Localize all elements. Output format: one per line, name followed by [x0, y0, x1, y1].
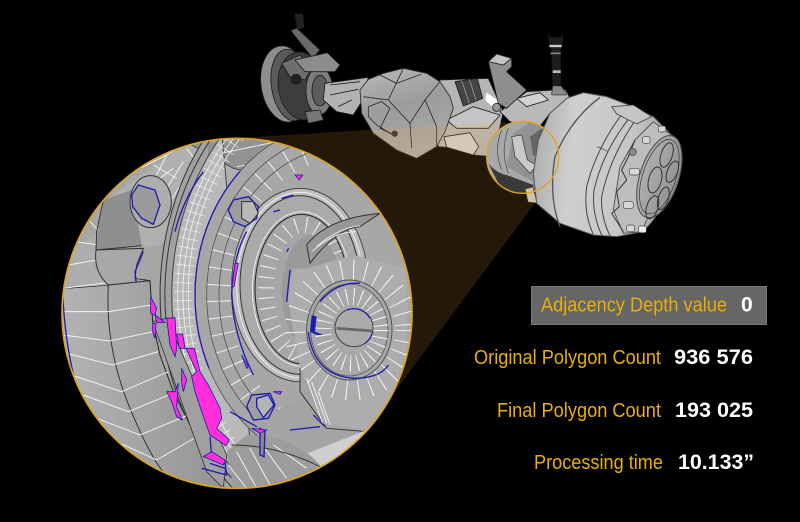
differential housing	[360, 68, 453, 158]
final polygon count	[497, 399, 753, 422]
processing time: Processing time	[534, 452, 663, 474]
original polygon count: Original Polygon Count	[474, 347, 661, 369]
curved fin	[307, 213, 380, 263]
left wheel hub	[256, 14, 368, 125]
base surface	[76, 139, 256, 488]
left tab fan	[65, 284, 108, 288]
lower right floor	[257, 370, 362, 452]
right fan region	[247, 173, 407, 275]
upper left block	[96, 190, 142, 250]
five lobed end face	[628, 130, 691, 223]
bottom bracket	[525, 187, 537, 203]
top right block	[193, 139, 271, 170]
left arm	[291, 28, 320, 58]
outer lower left ring	[57, 281, 227, 492]
right bracket	[488, 54, 527, 108]
depth label: Adjacency Depth value	[541, 294, 727, 316]
blue mesh edges	[63, 172, 325, 475]
zoom projection beam	[237, 122, 550, 421]
original polygon count: 936 576	[674, 346, 753, 369]
final polygon count: 193 025	[675, 399, 753, 422]
upper left bolt hole	[130, 176, 171, 228]
magenta problem faces	[151, 175, 303, 465]
central disk	[287, 213, 407, 430]
processing time	[534, 451, 754, 474]
right wheel drum	[533, 93, 691, 237]
drive shaft	[548, 33, 567, 95]
upper bolt	[228, 197, 258, 227]
flange rings	[165, 143, 208, 244]
depth number: 0	[741, 294, 753, 316]
circle outline	[62, 138, 412, 488]
top fan region	[110, 146, 240, 248]
depth value panel	[532, 286, 766, 324]
inner lower web	[153, 318, 227, 488]
small circle inset content	[487, 122, 543, 193]
lower bolt	[247, 393, 275, 457]
right tube and motor	[430, 54, 569, 157]
small focus circle	[487, 121, 559, 193]
inner bore	[232, 188, 368, 382]
left tube	[323, 77, 368, 115]
flange with bolts	[613, 122, 673, 233]
processing time: 10.133”	[678, 451, 754, 474]
axle assembly	[256, 14, 569, 158]
magnified wireframe circle	[61, 138, 413, 490]
final polygon count: Final Polygon Count	[497, 400, 661, 422]
